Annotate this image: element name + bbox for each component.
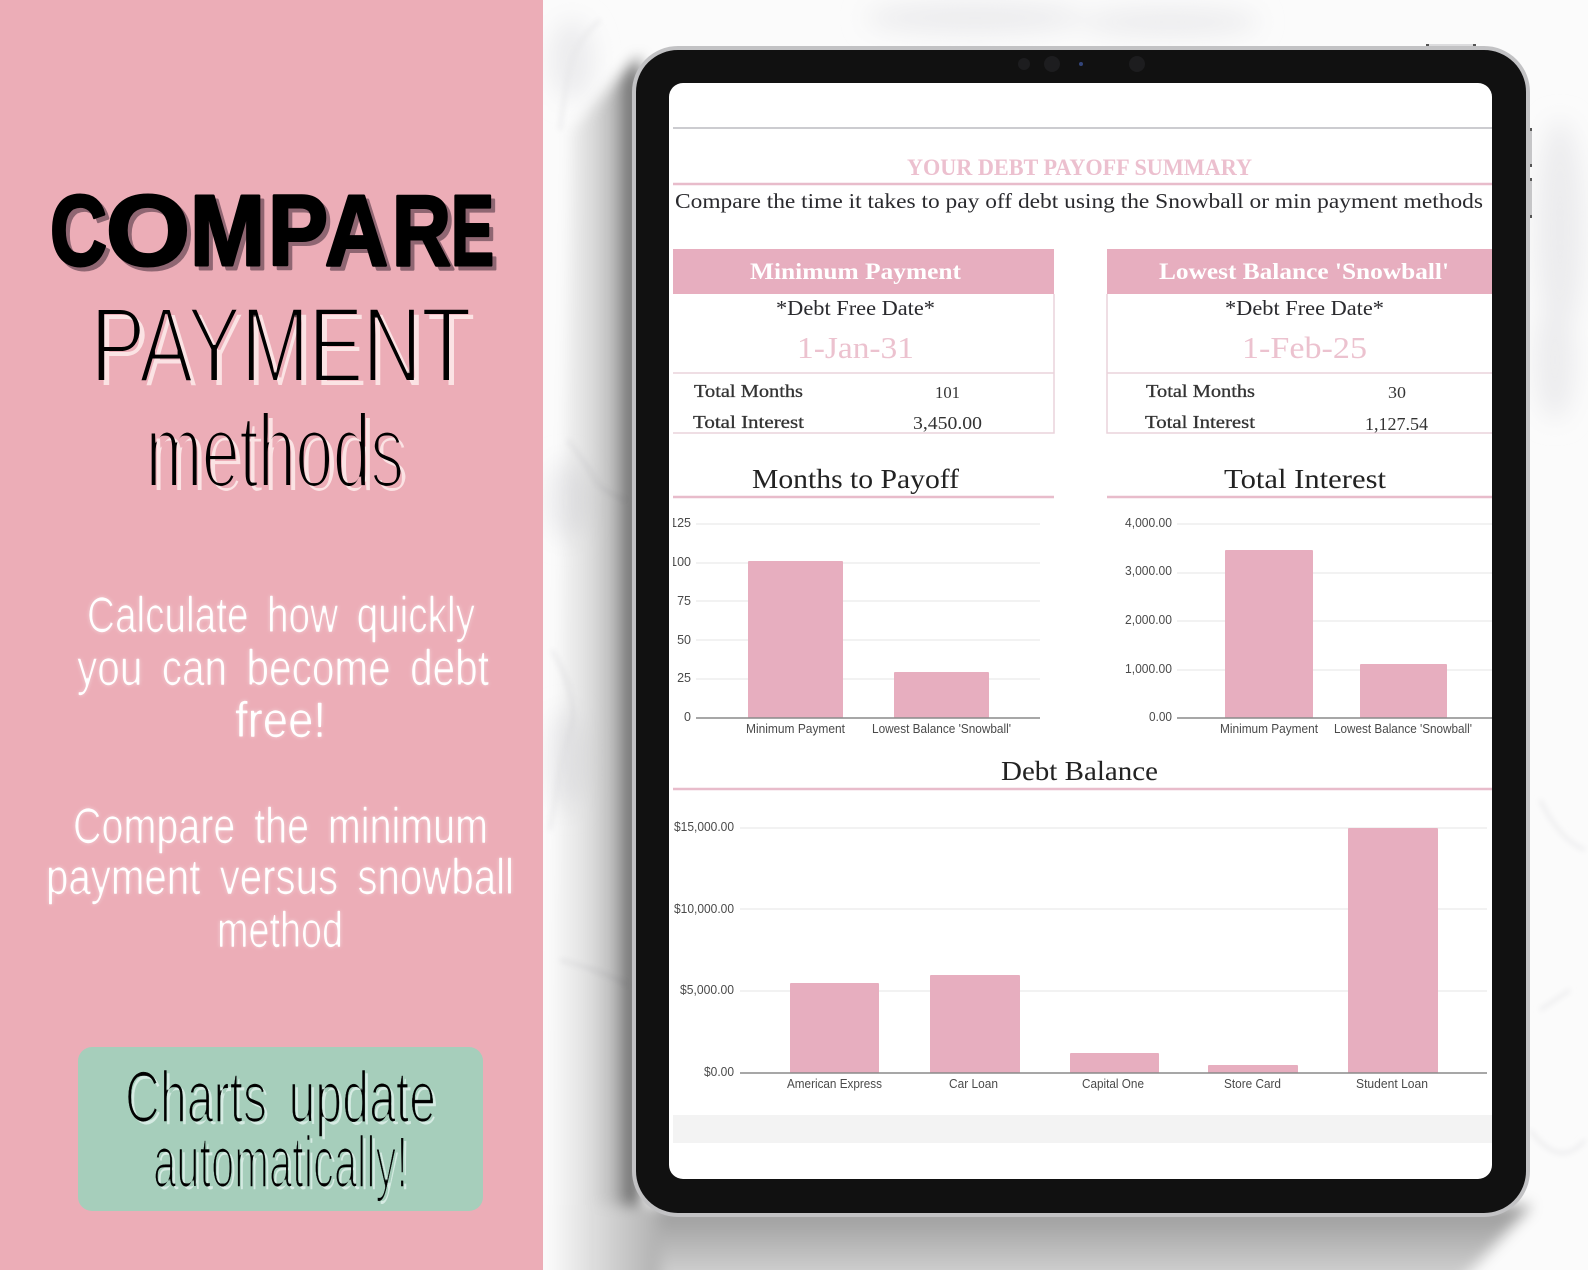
value: total months: 101: [935, 383, 960, 402]
category labels: Lowest Balance 'Snowball': [872, 722, 1011, 736]
value: total interest: 1,127.54: [1365, 414, 1428, 434]
heading: COMPARE: P: [268, 175, 328, 287]
value: date: 1-Feb-25: [1242, 330, 1367, 365]
text block: compare methods: Compare the minimum: [73, 798, 488, 854]
heading: methods: methods: [146, 393, 404, 510]
axis labels: 50: [677, 633, 691, 647]
tablet screen: [669, 83, 1492, 1179]
category labels: Minimum Payment: [746, 722, 846, 736]
axis labels: $5,000.00: [680, 983, 734, 997]
spreadsheet content: [670, 128, 1492, 1143]
title: YOUR DEBT PAYOFF SUMMARY: [907, 155, 1252, 180]
panel: snowball summary: [1107, 249, 1492, 434]
text block: calculate: Calculate how quickly: [87, 587, 475, 643]
axis labels: 0.00: [1149, 710, 1172, 724]
heading: COMPARE: O: [106, 175, 190, 287]
label: total months: Total Months: [1146, 381, 1255, 401]
header text: Minimum Payment: [750, 259, 961, 284]
label: total interest: Total Interest: [693, 412, 804, 432]
heading: COMPARE: R: [392, 175, 451, 287]
category labels: American Express: [787, 1077, 882, 1091]
heading: COMPARE: M: [190, 175, 265, 287]
header band: [673, 249, 1054, 294]
callout: charts update automatically: automatically!: [153, 1123, 408, 1203]
bar chart: debt balance: [673, 756, 1492, 1091]
axis labels: 75: [677, 594, 691, 608]
axis labels: 25: [677, 671, 691, 685]
chart heading: Debt Balance: [1001, 756, 1158, 786]
panel: left pink sidebar: [0, 0, 543, 1270]
text block: compare methods: payment versus snowball: [46, 849, 514, 905]
text block: calculate: [77, 587, 489, 748]
text block: calculate: you can become debt: [77, 640, 489, 696]
bar chart: months to payoff: [670, 464, 1054, 736]
axis labels: 2,000.00: [1125, 613, 1172, 627]
top button: [1426, 44, 1476, 47]
heading: PAYMENT: PAYMENT: [91, 284, 471, 405]
header band: [1107, 249, 1492, 294]
background: marble surface: [543, 0, 1588, 1270]
text block: compare methods: [46, 798, 514, 958]
chart heading: Months to Payoff: [752, 464, 959, 494]
value: date: 1-Jan-31: [797, 330, 914, 365]
category labels: Lowest Balance 'Snowball': [1334, 722, 1472, 736]
subtitle: Compare the time it takes to pay off debt using the Snowball or min payment methods: [675, 189, 1483, 213]
axis labels: 4,000.00: [1125, 516, 1172, 530]
bars: [790, 828, 1438, 1073]
axis labels: [674, 820, 734, 1079]
category labels: [746, 724, 1010, 736]
value: total interest: 3,450.00: [913, 413, 982, 433]
axis labels: 1,000.00: [1125, 662, 1172, 676]
category labels: [787, 1078, 1428, 1090]
callout: charts update automatically: Charts update: [125, 1058, 436, 1138]
label: debt free date: *Debt Free Date*: [776, 296, 935, 320]
text block: compare methods: method: [217, 902, 343, 958]
chart heading: Total Interest: [1224, 464, 1387, 494]
icon: camera dots: [1018, 56, 1145, 72]
heading: COMPARE: C: [50, 175, 107, 287]
axis labels: $10,000.00: [674, 902, 734, 916]
side buttons: [1529, 128, 1532, 218]
axis labels: 3,000.00: [1125, 564, 1172, 578]
callout: charts update automatically: [78, 1047, 483, 1211]
axis labels: $15,000.00: [674, 820, 734, 834]
bar chart: total interest: [1107, 464, 1492, 736]
category labels: Store Card: [1224, 1077, 1281, 1091]
axis labels: [673, 518, 690, 721]
category labels: Car Loan: [949, 1077, 998, 1091]
category labels: Capital One: [1082, 1077, 1144, 1091]
axis labels: 125: [670, 516, 691, 530]
axis labels: 0: [684, 710, 691, 724]
tablet cast shadow: [548, 56, 1532, 1270]
axis labels: [1125, 516, 1172, 724]
bars: [1225, 550, 1447, 718]
bars: [748, 561, 989, 718]
label: total months: Total Months: [694, 381, 803, 401]
text block: calculate: free!: [235, 692, 326, 748]
tablet device: [634, 44, 1532, 1215]
value: total months: 30: [1388, 383, 1406, 402]
heading: COMPARE: A: [325, 175, 388, 287]
heading: COMPARE: E: [451, 175, 494, 287]
header text: Lowest Balance 'Snowball': [1159, 259, 1449, 284]
label: debt free date: *Debt Free Date*: [1225, 296, 1384, 320]
axis labels: 100: [670, 555, 691, 569]
footer grey band: [673, 1115, 1492, 1143]
axis labels: $0.00: [704, 1065, 734, 1079]
category labels: Student Loan: [1356, 1077, 1428, 1091]
panel: minimum payment summary: [673, 249, 1054, 433]
category labels: Minimum Payment: [1220, 722, 1318, 736]
label: total interest: Total Interest: [1145, 412, 1255, 432]
category labels: [1220, 724, 1472, 736]
